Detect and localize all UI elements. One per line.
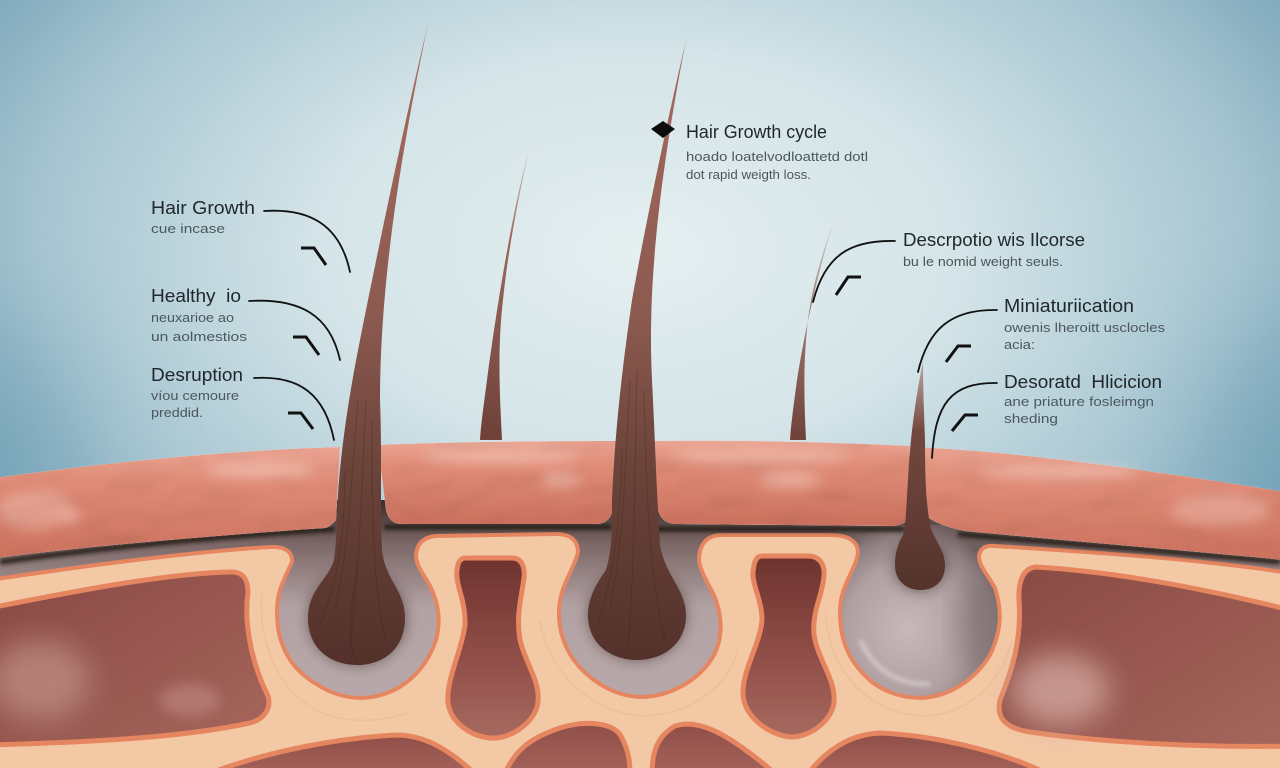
callout: Hair Growth cycle — [651, 121, 868, 182]
callout: Hair Growth cycle: Hair Growth cycle — [686, 122, 827, 142]
tissue cavity: right keyhole — [743, 556, 834, 737]
callout: Desruption: víou cemoure — [151, 388, 239, 403]
callout: Descrpotio wis Ilcorse — [813, 230, 1085, 302]
callout: Healthy io: Healthy io — [151, 286, 241, 306]
icon: diamond marker — [651, 121, 675, 138]
skin layer: four segments — [0, 441, 1280, 560]
callout: Hair Growth cycle: dot rapid weigth loss. — [686, 167, 811, 182]
callout: Desoratd Hlicicion — [932, 372, 1162, 458]
callout: Healthy io: neuxarioe ao — [151, 310, 234, 325]
peach lattice tissue — [0, 534, 1280, 768]
callout: Miniaturiication — [918, 296, 1166, 372]
hair shadows inside follicles — [307, 538, 947, 666]
callout: Desoratd Hlicicion: sheding — [1004, 411, 1058, 426]
lattice inner band highlights — [261, 590, 1012, 720]
callout: Desruption — [151, 365, 334, 440]
callout: Desruption: preddid. — [151, 405, 203, 420]
callout: Miniaturiication: Miniaturiication — [1004, 296, 1134, 316]
dermis base and follicle pockets — [0, 500, 1280, 768]
skin highlights — [0, 449, 1270, 530]
thin hairs behind skin — [480, 145, 838, 440]
hair: tall left with bulb — [308, 24, 428, 665]
callout: Hair Growth: Hair Growth — [151, 198, 255, 218]
tissue cavities along bottom edge — [205, 723, 1050, 768]
tissue cavity: left keyhole — [448, 558, 538, 738]
callout: Miniaturiication: owenis lheroitt usclocles — [1004, 320, 1166, 335]
callout: Healthy io — [151, 286, 340, 360]
tissue cavity: far left — [0, 572, 269, 745]
callout: Descrpotio wis Ilcorse: Descrpotio wis Ilcorse — [903, 230, 1085, 250]
callout: Desoratd Hlicicion: ane priature fosleimgn — [1004, 394, 1154, 409]
callout: Hair Growth cycle: hoado loatelvodloattetd dotl — [686, 149, 868, 164]
callout: Hair Growth: cue incase — [151, 221, 225, 236]
callout: Descrpotio wis Ilcorse: bu le nomid weight seuls. — [903, 254, 1063, 269]
callout: Healthy io: un aolmestios — [151, 329, 248, 344]
callout: Desoratd Hlicicion: Desoratd Hlicicion — [1004, 372, 1162, 392]
hair: miniaturised follicle — [895, 362, 945, 590]
hair: tall centre with bulb — [588, 40, 686, 660]
callout: Desruption: Desruption — [151, 365, 243, 385]
tissue cavity: far right — [999, 567, 1280, 746]
shadow beneath skin — [0, 527, 1280, 562]
callout: Hair Growth — [151, 198, 350, 272]
callout: Miniaturiication: acia: — [1004, 337, 1035, 352]
background edge vignette — [0, 320, 1280, 580]
